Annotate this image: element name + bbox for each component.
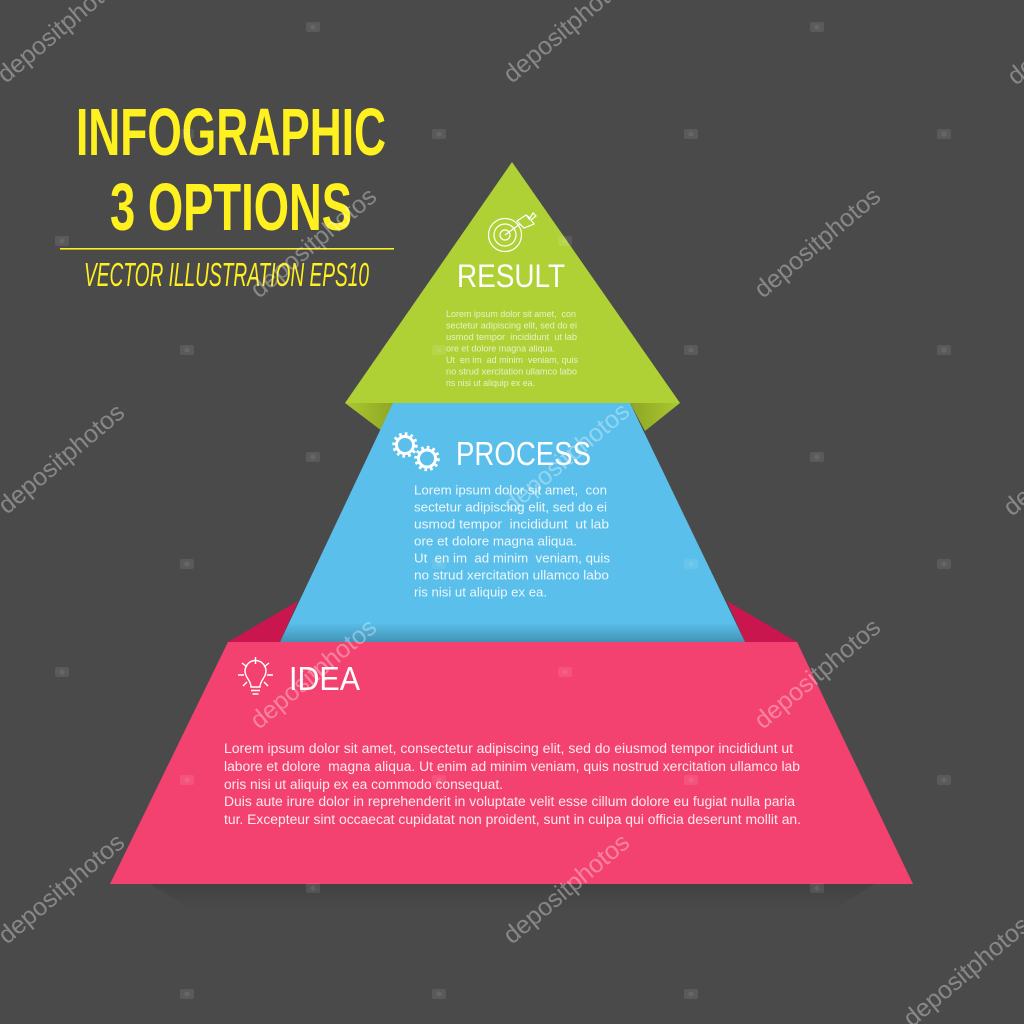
text: result: sectetur adipiscing elit, sed do ei bbox=[446, 320, 577, 330]
text: process: no strud xercitation ullamco labo bbox=[414, 568, 609, 582]
icon: target bbox=[488, 213, 536, 252]
subtitle: VECTOR ILLUSTRATION EPS10 bbox=[84, 256, 369, 293]
title rule bbox=[60, 248, 394, 250]
watermarks: depositphotos bbox=[245, 613, 382, 735]
text: process: ore et dolore magna aliqua. bbox=[414, 534, 577, 548]
pyramid tier: idea folds bbox=[228, 601, 797, 642]
title block bbox=[60, 95, 394, 293]
text: process: sectetur adipiscing elit, sed do ei bbox=[414, 500, 607, 514]
pyramid tier: idea bbox=[110, 642, 913, 884]
text: process bbox=[414, 482, 610, 600]
green fold left bbox=[345, 403, 395, 431]
crimson fold right bbox=[727, 601, 797, 642]
watermarks: depositphotos bbox=[498, 828, 635, 950]
floor shadow bbox=[150, 884, 875, 912]
text: result: ore et dolore magna aliqua. bbox=[446, 344, 555, 354]
text: idea bbox=[224, 741, 801, 827]
green triangle bbox=[345, 162, 680, 403]
text: idea: Duis aute irure dolor in reprehenderit in voluptate velit esse cillum dolore eu fugiat nulla paria bbox=[224, 794, 796, 809]
text: result: Ut en im ad minim veniam, quis bbox=[446, 355, 578, 365]
text: result: Lorem ipsum dolor sit amet, con bbox=[446, 309, 576, 319]
text: process: Lorem ipsum dolor sit amet, con bbox=[414, 482, 607, 498]
crimson fold left bbox=[228, 601, 298, 642]
text: result: no strud xercitation ullamco labo bbox=[446, 366, 577, 376]
green fold right bbox=[630, 403, 680, 431]
watermarks: depositphotos bbox=[749, 613, 886, 735]
heading: result: RESULT bbox=[457, 258, 565, 294]
blue trapezoid bbox=[280, 403, 745, 642]
text: process: Ut en im ad minim veniam, quis bbox=[414, 550, 610, 566]
pyramid tier: process bbox=[280, 403, 745, 642]
text: idea: labore et dolore magna aliqua. Ut enim ad minim veniam, quis nostrud xercitation ullamco lab bbox=[224, 759, 800, 774]
watermarks: depositphotos bbox=[749, 182, 886, 304]
heading: process: PROCESS bbox=[456, 435, 591, 472]
heading: idea: IDEA bbox=[289, 660, 360, 697]
text: process: ris nisi ut aliquip ex ea. bbox=[414, 584, 547, 600]
title line 2: 3 OPTIONS bbox=[110, 170, 352, 245]
text: idea: oris nisi ut aliquip ex ea commodo consequat. bbox=[224, 777, 503, 792]
icon: light bulb bbox=[238, 657, 273, 694]
text: result: ris nisi ut aliquip ex ea. bbox=[446, 378, 535, 388]
icon: gears bbox=[394, 434, 438, 470]
text: idea: tur. Excepteur sint occaecat cupidatat non proident, sunt in culpa qui officia deserunt mollit an. bbox=[224, 812, 801, 827]
watermarks: depositphotos bbox=[245, 182, 382, 304]
watermarks: depositphotos bbox=[498, 397, 635, 519]
text: result: usmod tempor incididunt ut lab bbox=[446, 332, 577, 342]
text: result bbox=[446, 309, 578, 388]
red trapezoid bbox=[110, 642, 913, 884]
text: process: usmod tempor incididunt ut lab bbox=[414, 516, 609, 532]
text: idea: Lorem ipsum dolor sit amet, consectetur adipiscing elit, sed do eiusmod tempor incididunt ut bbox=[224, 741, 793, 756]
title line 1: INFOGRAPHIC bbox=[76, 95, 386, 170]
pyramid tier: result bbox=[345, 162, 680, 431]
